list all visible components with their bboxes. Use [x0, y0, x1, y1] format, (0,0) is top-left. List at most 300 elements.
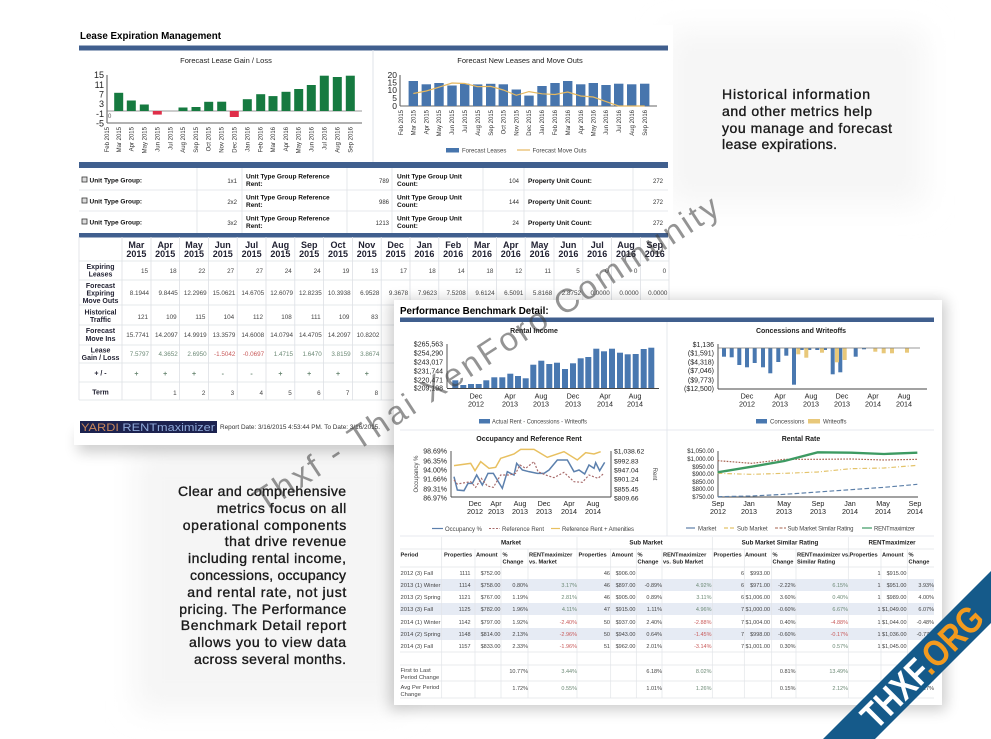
- table: benchmark data by period: Properties: [714, 552, 742, 558]
- table: benchmark data by period: Sub Market Similar Rating: [742, 540, 819, 546]
- table: monthly lease forecast: 4: [259, 390, 263, 397]
- table: monthly lease forecast: May: [185, 240, 203, 250]
- text block: clear and comprehensive metrics: that drive revenue: [225, 533, 346, 549]
- table: benchmark data by period: $989.00: [887, 595, 906, 601]
- table: monthly lease forecast: 14.4705: [299, 332, 322, 339]
- chart: rental income: $231,744: [414, 368, 443, 376]
- chart: forecast lease gain / loss: Apr 2016: [284, 126, 290, 151]
- table: monthly lease forecast: Move Ins: [86, 336, 116, 343]
- table: benchmark data by period: 1142: [459, 620, 470, 626]
- table: benchmark data by period: 1.19%: [512, 595, 528, 601]
- chart: forecast new leases and move outs: 20: [388, 70, 397, 80]
- table: benchmark data by period: 13.49%: [829, 669, 848, 675]
- table: monthly lease forecast: 108: [281, 314, 292, 321]
- table: monthly lease forecast: 2016: [443, 249, 463, 259]
- table: unit type group summary: Unit Type Group Reference: [246, 216, 330, 222]
- table: monthly lease forecast: Aug: [272, 240, 289, 250]
- table: benchmark data by period: $833.00: [481, 644, 500, 650]
- table: monthly lease forecast: 14.6705: [241, 290, 265, 297]
- chart: forecast new leases and move outs: 10: [388, 85, 397, 95]
- chart: forecast new leases and move outs: Apr 2015: [424, 109, 430, 134]
- chart: occupancy and reference rent: $947.04: [614, 468, 639, 474]
- table: unit type group summary: 986: [379, 200, 390, 206]
- table: benchmark data by period: 1148: [459, 632, 470, 638]
- table: monthly lease forecast: 5: [288, 390, 292, 397]
- table: monthly lease forecast: 9.3678: [389, 290, 409, 297]
- table: benchmark data by period: Market: [501, 540, 521, 546]
- chart: occupancy and reference rent: Dec: [469, 499, 482, 508]
- table: benchmark data by period: $758.00: [481, 583, 500, 589]
- chart: forecast new leases and move outs: Aug 2016: [630, 109, 636, 136]
- table: unit type group summary: Unit Type Group Unit: [397, 216, 463, 222]
- table: monthly lease forecast: 9.8445: [159, 290, 178, 297]
- chart: forecast lease gain / loss: Oct 2015: [207, 126, 213, 151]
- table: benchmark data by period: 2013 (1) Winter: [400, 583, 441, 589]
- table: monthly lease forecast: 0: [634, 268, 638, 275]
- table: benchmark data by period: $1,036.00: [882, 632, 906, 638]
- chart: occupancy and reference rent: Occupancy %: [414, 455, 420, 493]
- table: benchmark data by period: 6.67%: [832, 607, 848, 613]
- chart: forecast new leases and move outs: Mar 2015: [412, 109, 418, 135]
- chart: concessions and writeoffs: [684, 328, 927, 426]
- table: monthly lease forecast: -1.5042: [214, 351, 236, 358]
- table: benchmark data by period: 1111: [459, 571, 470, 577]
- table: benchmark data by period: 0.15%: [780, 686, 796, 692]
- table: monthly lease forecast: Nov: [358, 240, 375, 250]
- chart: occupancy and reference rent: Aug: [587, 499, 599, 508]
- table: benchmark data by period: 6: [741, 595, 744, 601]
- table: monthly lease forecast: 3: [231, 390, 235, 397]
- table: unit type group summary: Unit Type Group Unit: [397, 174, 463, 180]
- chart: rental rate: $950.00: [692, 465, 715, 471]
- table: monthly lease forecast: 14.0794: [270, 332, 293, 339]
- table: benchmark data by period: RENTmaximizer: [868, 540, 916, 546]
- table: unit type group summary: 1213: [376, 221, 390, 227]
- table: benchmark data by period: 0.57%: [832, 644, 848, 650]
- chart: concessions and writeoffs: Dec: [836, 392, 849, 400]
- table: benchmark data by period: 1: [877, 583, 880, 589]
- table: benchmark data by period: 1.26%: [696, 686, 712, 692]
- table: monthly lease forecast: 2.8752: [562, 290, 581, 297]
- table: monthly lease forecast: Mar: [128, 240, 145, 250]
- table: monthly lease forecast: 1: [173, 390, 177, 397]
- table: benchmark data by period: 0.64%: [646, 632, 662, 638]
- chart: concessions and writeoffs: 2014: [896, 400, 912, 408]
- table: benchmark data by period: 1121: [459, 595, 470, 601]
- table: benchmark data by period: $906.00: [616, 571, 636, 577]
- panel: performance benchmark detail report: [394, 300, 942, 705]
- chart: rental rate: May: [777, 499, 791, 508]
- table: unit type group summary: Count:: [397, 202, 418, 209]
- table: benchmark data by period: 2.40%: [646, 620, 662, 626]
- chart: rental income: 2014: [627, 400, 643, 408]
- chart: concessions and writeoffs: 2012: [739, 400, 755, 408]
- chart: concessions and writeoffs: ($12,500): [684, 386, 714, 393]
- table: unit type group summary: Unit Type Group Reference: [246, 174, 330, 180]
- table: monthly lease forecast: 2015: [328, 249, 348, 259]
- chart: occupancy and reference rent: 2013: [512, 507, 528, 516]
- table: benchmark data by period: %: [502, 552, 508, 558]
- table: monthly lease forecast: 2016: [472, 249, 492, 259]
- table: benchmark data by period: Similar Rating: [797, 560, 836, 566]
- table: benchmark data by period: Properties: [444, 552, 472, 558]
- table: benchmark data by period: 2.13%: [512, 632, 528, 638]
- table: monthly lease forecast: 2016: [645, 249, 665, 259]
- table: benchmark data by period: [400, 537, 934, 698]
- table: monthly lease forecast: 104: [224, 314, 235, 321]
- table: benchmark data by period: 46: [604, 583, 610, 589]
- table: benchmark data by period: Amount: [882, 552, 904, 558]
- table: benchmark data by period: Period: [400, 552, 419, 558]
- table: unit type group summary: Property Unit Count:: [528, 199, 592, 206]
- table: benchmark data by period: vs. Market: [529, 560, 557, 566]
- table: benchmark data by period: -1.96%: [560, 644, 577, 650]
- table: benchmark data by period: -0.17%: [831, 632, 848, 638]
- chart: forecast new leases and move outs: 5: [392, 93, 397, 103]
- table: unit type group summary: Rent:: [246, 202, 263, 209]
- table: benchmark data by period: 50: [604, 620, 610, 626]
- table: monthly lease forecast: 15.7741: [126, 332, 149, 339]
- table: monthly lease forecast: Sep: [647, 240, 664, 250]
- chart: concessions and writeoffs: ($7,046): [688, 368, 714, 375]
- table: monthly lease forecast: 15: [141, 268, 148, 275]
- table: unit type group summary: 272: [653, 200, 664, 206]
- table: monthly lease forecast: 19: [342, 268, 350, 275]
- chart: occupancy and reference rent: $809.66: [614, 496, 639, 502]
- table: monthly lease forecast: Expiring: [86, 264, 115, 271]
- table: monthly lease forecast: 2016: [414, 249, 434, 259]
- table: benchmark data by period: 7: [741, 607, 744, 613]
- table: monthly lease forecast: 1.6470: [303, 351, 322, 358]
- table: monthly lease forecast: 27: [256, 268, 263, 275]
- table: benchmark data by period: $905.00: [616, 595, 636, 601]
- chart: rental income: Rental Income: [510, 328, 558, 335]
- table: benchmark data by period: $797.00: [481, 620, 500, 626]
- table: monthly lease forecast: 10.8202: [357, 332, 380, 339]
- report date footer: Report Date: 3/16/2015 4:53:44 PM. To Date: 3/16/2015.: [220, 425, 380, 431]
- chart: concessions and writeoffs: Concessions and Writeoffs: [756, 328, 846, 335]
- table: unit type group summary: Count:: [397, 181, 418, 188]
- table: monthly lease forecast: 22: [198, 268, 206, 275]
- chart: rental income: Aug: [629, 392, 641, 400]
- table: benchmark data by period: $962.00: [616, 644, 636, 650]
- table: benchmark data by period: 6: [741, 583, 744, 589]
- table: monthly lease forecast: 5.8168: [533, 290, 553, 297]
- table: unit type group summary: Unit Type Group:: [90, 178, 142, 184]
- table: monthly lease forecast: 115: [195, 314, 206, 321]
- logo: yardi rentmaximizer: YARDI RENTmaximizer: [81, 422, 215, 434]
- table: monthly lease forecast: 7: [346, 390, 350, 397]
- chart: occupancy and reference rent: $901.24: [614, 476, 639, 484]
- table: benchmark data by period: 7: [741, 632, 744, 638]
- chart: occupancy and reference rent: 94.00%: [423, 468, 447, 474]
- table: benchmark data by period: Change: [908, 560, 929, 566]
- table: benchmark data by period: $971.00: [750, 583, 770, 589]
- table: monthly lease forecast: +: [278, 371, 282, 378]
- text block: clear and comprehensive metrics: pricing. The Performance: [179, 601, 347, 617]
- table: monthly lease forecast: Apr: [157, 240, 173, 250]
- table: unit type group summary: 104: [509, 179, 520, 185]
- table: monthly lease forecast: Traffic: [90, 317, 111, 324]
- chart: forecast lease gain / loss: 0: [108, 114, 112, 120]
- table: unit type group summary: 144: [509, 200, 520, 206]
- chart: forecast new leases and move outs: Forecast Move Outs: [532, 148, 587, 154]
- chart: forecast lease gain / loss: Mar 2015: [117, 126, 123, 152]
- table: monthly lease forecast: 8: [375, 390, 379, 397]
- text block: clear and comprehensive metrics: [178, 483, 347, 667]
- chart: rental income: $243,017: [414, 360, 443, 366]
- table: monthly lease forecast: Dec: [387, 240, 404, 250]
- table: benchmark data by period: 3.17%: [561, 583, 577, 589]
- table: benchmark data by period: Amount: [476, 552, 498, 558]
- chart: concessions and writeoffs: 2013: [803, 400, 819, 408]
- table: monthly lease forecast: 8.1944: [130, 290, 149, 297]
- table: unit type group summary: [79, 168, 668, 233]
- chart: occupancy and reference rent: Occupancy %: [445, 527, 483, 533]
- table: monthly lease forecast: 2016: [501, 249, 521, 259]
- table: benchmark data by period: -2.22%: [778, 583, 796, 589]
- table: benchmark data by period: $897.00: [616, 583, 636, 589]
- chart: rental income: 2014: [597, 400, 613, 408]
- table: benchmark data by period: 1: [877, 644, 880, 650]
- chart: forecast lease gain / loss: -1: [96, 109, 104, 119]
- table: monthly lease forecast: 3.8159: [331, 351, 351, 358]
- table: benchmark data by period: -2.88%: [694, 620, 712, 626]
- chart: forecast new leases and move outs: Forecast Leases: [462, 148, 506, 154]
- chart: rental income: Dec: [567, 392, 580, 400]
- table: benchmark data by period: 10.77%: [509, 669, 528, 675]
- chart: forecast new leases and move outs: Feb 2015: [399, 109, 405, 135]
- table: monthly lease forecast: 0: [663, 268, 667, 275]
- table: benchmark data by period: 6.18%: [646, 669, 662, 675]
- table: benchmark data by period: 6.07%: [918, 607, 934, 613]
- chart: forecast new leases and move outs: Nov 2015: [514, 109, 520, 136]
- table: monthly lease forecast: +: [134, 371, 138, 378]
- chart: forecast lease gain / loss: -5: [96, 118, 104, 128]
- table: monthly lease forecast: Oct: [330, 240, 346, 250]
- table: monthly lease forecast: 2015: [357, 249, 377, 259]
- table: benchmark data by period: 2.01%: [646, 644, 662, 650]
- text block: clear and comprehensive metrics: Benchmark Detail report: [181, 617, 346, 633]
- heading: lease expiration management: Lease Expiration Management: [80, 31, 222, 42]
- text block: clear and comprehensive metrics: metrics focus on all: [217, 500, 346, 516]
- table: benchmark data by period: 2013 (2) Spring: [400, 595, 440, 601]
- chart: occupancy and reference rent: 2013: [488, 507, 504, 516]
- table: benchmark data by period: $1,045.00: [882, 644, 906, 650]
- table: monthly lease forecast: 121: [137, 314, 148, 321]
- table: monthly lease forecast: Jul: [245, 240, 258, 250]
- chart: forecast new leases and move outs: 0: [392, 101, 397, 111]
- table: benchmark data by period: $915.00: [887, 571, 906, 577]
- chart: occupancy and reference rent: 89.31%: [423, 486, 447, 494]
- table: monthly lease forecast: +: [336, 371, 340, 378]
- table: benchmark data by period: 7: [741, 620, 744, 626]
- table: monthly lease forecast: Jun: [215, 240, 231, 250]
- table: monthly lease forecast: 18: [170, 268, 177, 275]
- chart: rental income: $209,198: [414, 386, 443, 392]
- chart: rental rate: $1,050.00: [687, 449, 715, 455]
- chart: rental income: [414, 328, 659, 426]
- table: monthly lease forecast: 10.3938: [328, 290, 351, 297]
- chart: rental income: 2013: [533, 400, 549, 408]
- table: benchmark data by period: $1,044.00: [882, 620, 906, 626]
- chart: occupancy and reference rent: Aug: [514, 499, 526, 508]
- table: benchmark data by period: -0.89%: [645, 583, 662, 589]
- chart: forecast new leases and move outs: Sep 2016: [643, 109, 649, 136]
- table: benchmark data by period: 1.96%: [512, 607, 528, 613]
- chart: concessions and writeoffs: 2013: [834, 400, 850, 408]
- chart: forecast new leases and move outs: Sep 2015: [489, 109, 495, 136]
- table: monthly lease forecast: 3.8674: [360, 351, 380, 358]
- table: benchmark data by period: $951.00: [887, 583, 906, 589]
- table: benchmark data by period: RENTmaximizer vs.: [797, 552, 850, 558]
- table: monthly lease forecast: Term: [92, 390, 109, 396]
- table: benchmark data by period: 51: [604, 644, 610, 650]
- table: benchmark data by period: 1: [877, 607, 880, 613]
- table: benchmark data by period: 2.12%: [832, 686, 848, 692]
- panel: lease expiration management report: [74, 25, 673, 445]
- chart: concessions and writeoffs: Dec: [741, 392, 754, 400]
- table: unit type group summary: Unit Type Group Reference: [246, 194, 330, 202]
- chart: forecast new leases and move outs: May 2015: [437, 109, 443, 136]
- table: monthly lease forecast: 12.2969: [184, 290, 207, 297]
- chart: rental income: Apr: [504, 392, 516, 400]
- table: benchmark data by period: 4.96%: [696, 607, 712, 613]
- chart: concessions and writeoffs: ($1,591): [688, 350, 714, 358]
- table: monthly lease forecast: Sep: [301, 240, 318, 250]
- table: benchmark data by period: $1,001.00: [746, 644, 770, 650]
- table: benchmark data by period: 2.33%: [512, 644, 528, 650]
- table: monthly lease forecast: Forecast: [86, 328, 116, 335]
- table: benchmark data by period: Properties: [850, 552, 878, 558]
- table: benchmark data by period: RENTmaximizer: [529, 552, 573, 558]
- text block: clear and comprehensive metrics: and rental rate, not just: [187, 584, 346, 600]
- text block: clear and comprehensive metrics: concessions, occupancy: [190, 567, 346, 583]
- chart: rental income: Actual Rent - Concessions - Writeoffs: [492, 420, 587, 426]
- table: benchmark data by period: $1,000.00: [746, 607, 770, 613]
- table: benchmark data by period: 47: [604, 607, 610, 613]
- table: benchmark data by period: 0.89%: [646, 595, 662, 601]
- chart: forecast lease gain / loss: Mar 2016: [271, 126, 277, 152]
- chart: occupancy and reference rent: Reference Rent + Amenities: [562, 527, 634, 533]
- chart: forecast lease gain / loss: Forecast Lease Gain / Loss: [180, 56, 272, 65]
- chart: forecast new leases and move outs: Aug 2015: [476, 109, 482, 136]
- table: monthly lease forecast: Jul: [591, 240, 604, 250]
- chart: concessions and writeoffs: 2014: [865, 400, 881, 408]
- table: benchmark data by period: Change: [502, 560, 523, 566]
- table: monthly lease forecast: +: [192, 371, 196, 378]
- table: monthly lease forecast: 18: [486, 268, 494, 275]
- table: benchmark data by period: 0.40%: [780, 620, 796, 626]
- table: benchmark data by period: 6.15%: [832, 583, 848, 589]
- chart: forecast lease gain / loss: Feb 2016: [259, 126, 265, 152]
- text block: clear and comprehensive metrics: across several months.: [194, 651, 346, 667]
- text block: clear and comprehensive metrics: allows you to view data: [189, 634, 346, 650]
- table: unit type group summary: 789: [379, 179, 390, 185]
- table: unit type group summary: 2x2: [227, 200, 238, 206]
- table: monthly lease forecast: 6.9528: [360, 290, 380, 297]
- chart: forecast new leases and move outs: Feb 2016: [553, 109, 559, 135]
- chart: forecast lease gain / loss: Nov 2015: [220, 126, 226, 153]
- table: benchmark data by period: 0.40%: [832, 595, 848, 601]
- table: benchmark data by period: $998.00: [750, 632, 770, 638]
- table: benchmark data by period: $814.00: [481, 632, 500, 638]
- table: benchmark data by period: Change: [772, 560, 793, 566]
- chart: rental rate: $850.00: [692, 480, 715, 486]
- chart: forecast lease gain / loss: Sep 2016: [348, 126, 354, 153]
- table: monthly lease forecast: 7.5208: [447, 290, 466, 297]
- table: monthly lease forecast: 2015: [386, 249, 406, 259]
- chart: forecast lease gain / loss: Sep 2015: [194, 126, 200, 153]
- chart: rental income: $254,290: [414, 350, 443, 358]
- chart: forecast new leases and move outs: Jun 2015: [450, 109, 456, 135]
- table: monthly lease forecast: 6.5091: [504, 290, 524, 297]
- table: monthly lease forecast: 2015: [270, 249, 290, 259]
- chart: rental rate: 2013: [741, 507, 757, 516]
- table: monthly lease forecast: 24: [285, 268, 292, 275]
- chart: occupancy and reference rent: Reference Rent: [502, 527, 544, 533]
- chart: rental income: 2012: [468, 400, 484, 408]
- chart: forecast lease gain / loss: Jun 2016: [309, 126, 315, 152]
- chart: rental rate: Sep: [812, 499, 824, 508]
- table: monthly lease forecast: 12.8235: [299, 290, 322, 297]
- table: monthly lease forecast: 9.6124: [475, 290, 495, 297]
- chart: rental rate: $800.00: [692, 487, 715, 493]
- table: benchmark data by period: %: [908, 552, 914, 558]
- chart: forecast lease gain / loss: 7: [99, 90, 104, 100]
- chart: occupancy and reference rent: Dec: [538, 499, 551, 508]
- chart: occupancy and reference rent: Apr: [490, 499, 502, 508]
- table: unit type group summary: 24: [512, 221, 520, 227]
- table: monthly lease forecast: Leases: [89, 272, 112, 278]
- chart: rental rate: Rental Rate: [782, 436, 820, 443]
- table: benchmark data by period: 4.11%: [562, 607, 577, 613]
- chart: forecast new leases and move outs: Jul 2016: [617, 109, 623, 133]
- table: benchmark data by period: 2013 (3) Fall: [400, 607, 433, 613]
- chart: forecast new leases and move outs: 15: [388, 78, 397, 88]
- table: benchmark data by period: Change: [638, 560, 658, 566]
- table: benchmark data by period: Avg Per Period: [400, 685, 439, 691]
- table: monthly lease forecast: + / -: [94, 370, 107, 378]
- table: unit type group summary: Count:: [397, 223, 418, 230]
- table: monthly lease forecast: 2016: [616, 249, 636, 259]
- table: monthly lease forecast: Jan: [417, 240, 432, 250]
- table: benchmark data by period: 1157: [459, 644, 470, 650]
- chart: forecast new leases and move outs: Jul 2015: [463, 109, 469, 133]
- table: benchmark data by period: 1: [877, 632, 880, 638]
- table: benchmark data by period: 4.00%: [918, 595, 934, 601]
- table: benchmark data by period: 2012 (3) Fall: [400, 571, 433, 577]
- chart: occupancy and reference rent: 2014: [561, 507, 577, 516]
- table: unit type group summary: 3x2: [227, 221, 238, 227]
- table: benchmark data by period: 1: [877, 595, 880, 601]
- table: benchmark data by period: $943.00: [616, 632, 636, 638]
- chart: occupancy and reference rent: 2014: [585, 507, 601, 516]
- chart: forecast lease gain / loss: Jul 2015: [168, 126, 174, 150]
- text block: historical information: lease expirations.: [722, 136, 837, 152]
- table: monthly lease forecast: 0.0000: [619, 290, 639, 297]
- table: unit type group summary: Rent:: [246, 223, 263, 230]
- table: benchmark data by period: -4.88%: [831, 620, 848, 626]
- chart: occupancy and reference rent: 2013: [536, 507, 552, 516]
- table: monthly lease forecast: 2015: [213, 249, 233, 259]
- table: unit type group summary: Unit Type Group Unit: [397, 194, 463, 202]
- table: benchmark data by period: 50: [604, 632, 610, 638]
- chart: occupancy and reference rent: Apr: [563, 499, 575, 508]
- table: unit type group summary: Property Unit Count:: [528, 178, 592, 185]
- table: benchmark data by period: 46: [604, 595, 610, 601]
- table: benchmark data by period: -3.14%: [694, 644, 712, 650]
